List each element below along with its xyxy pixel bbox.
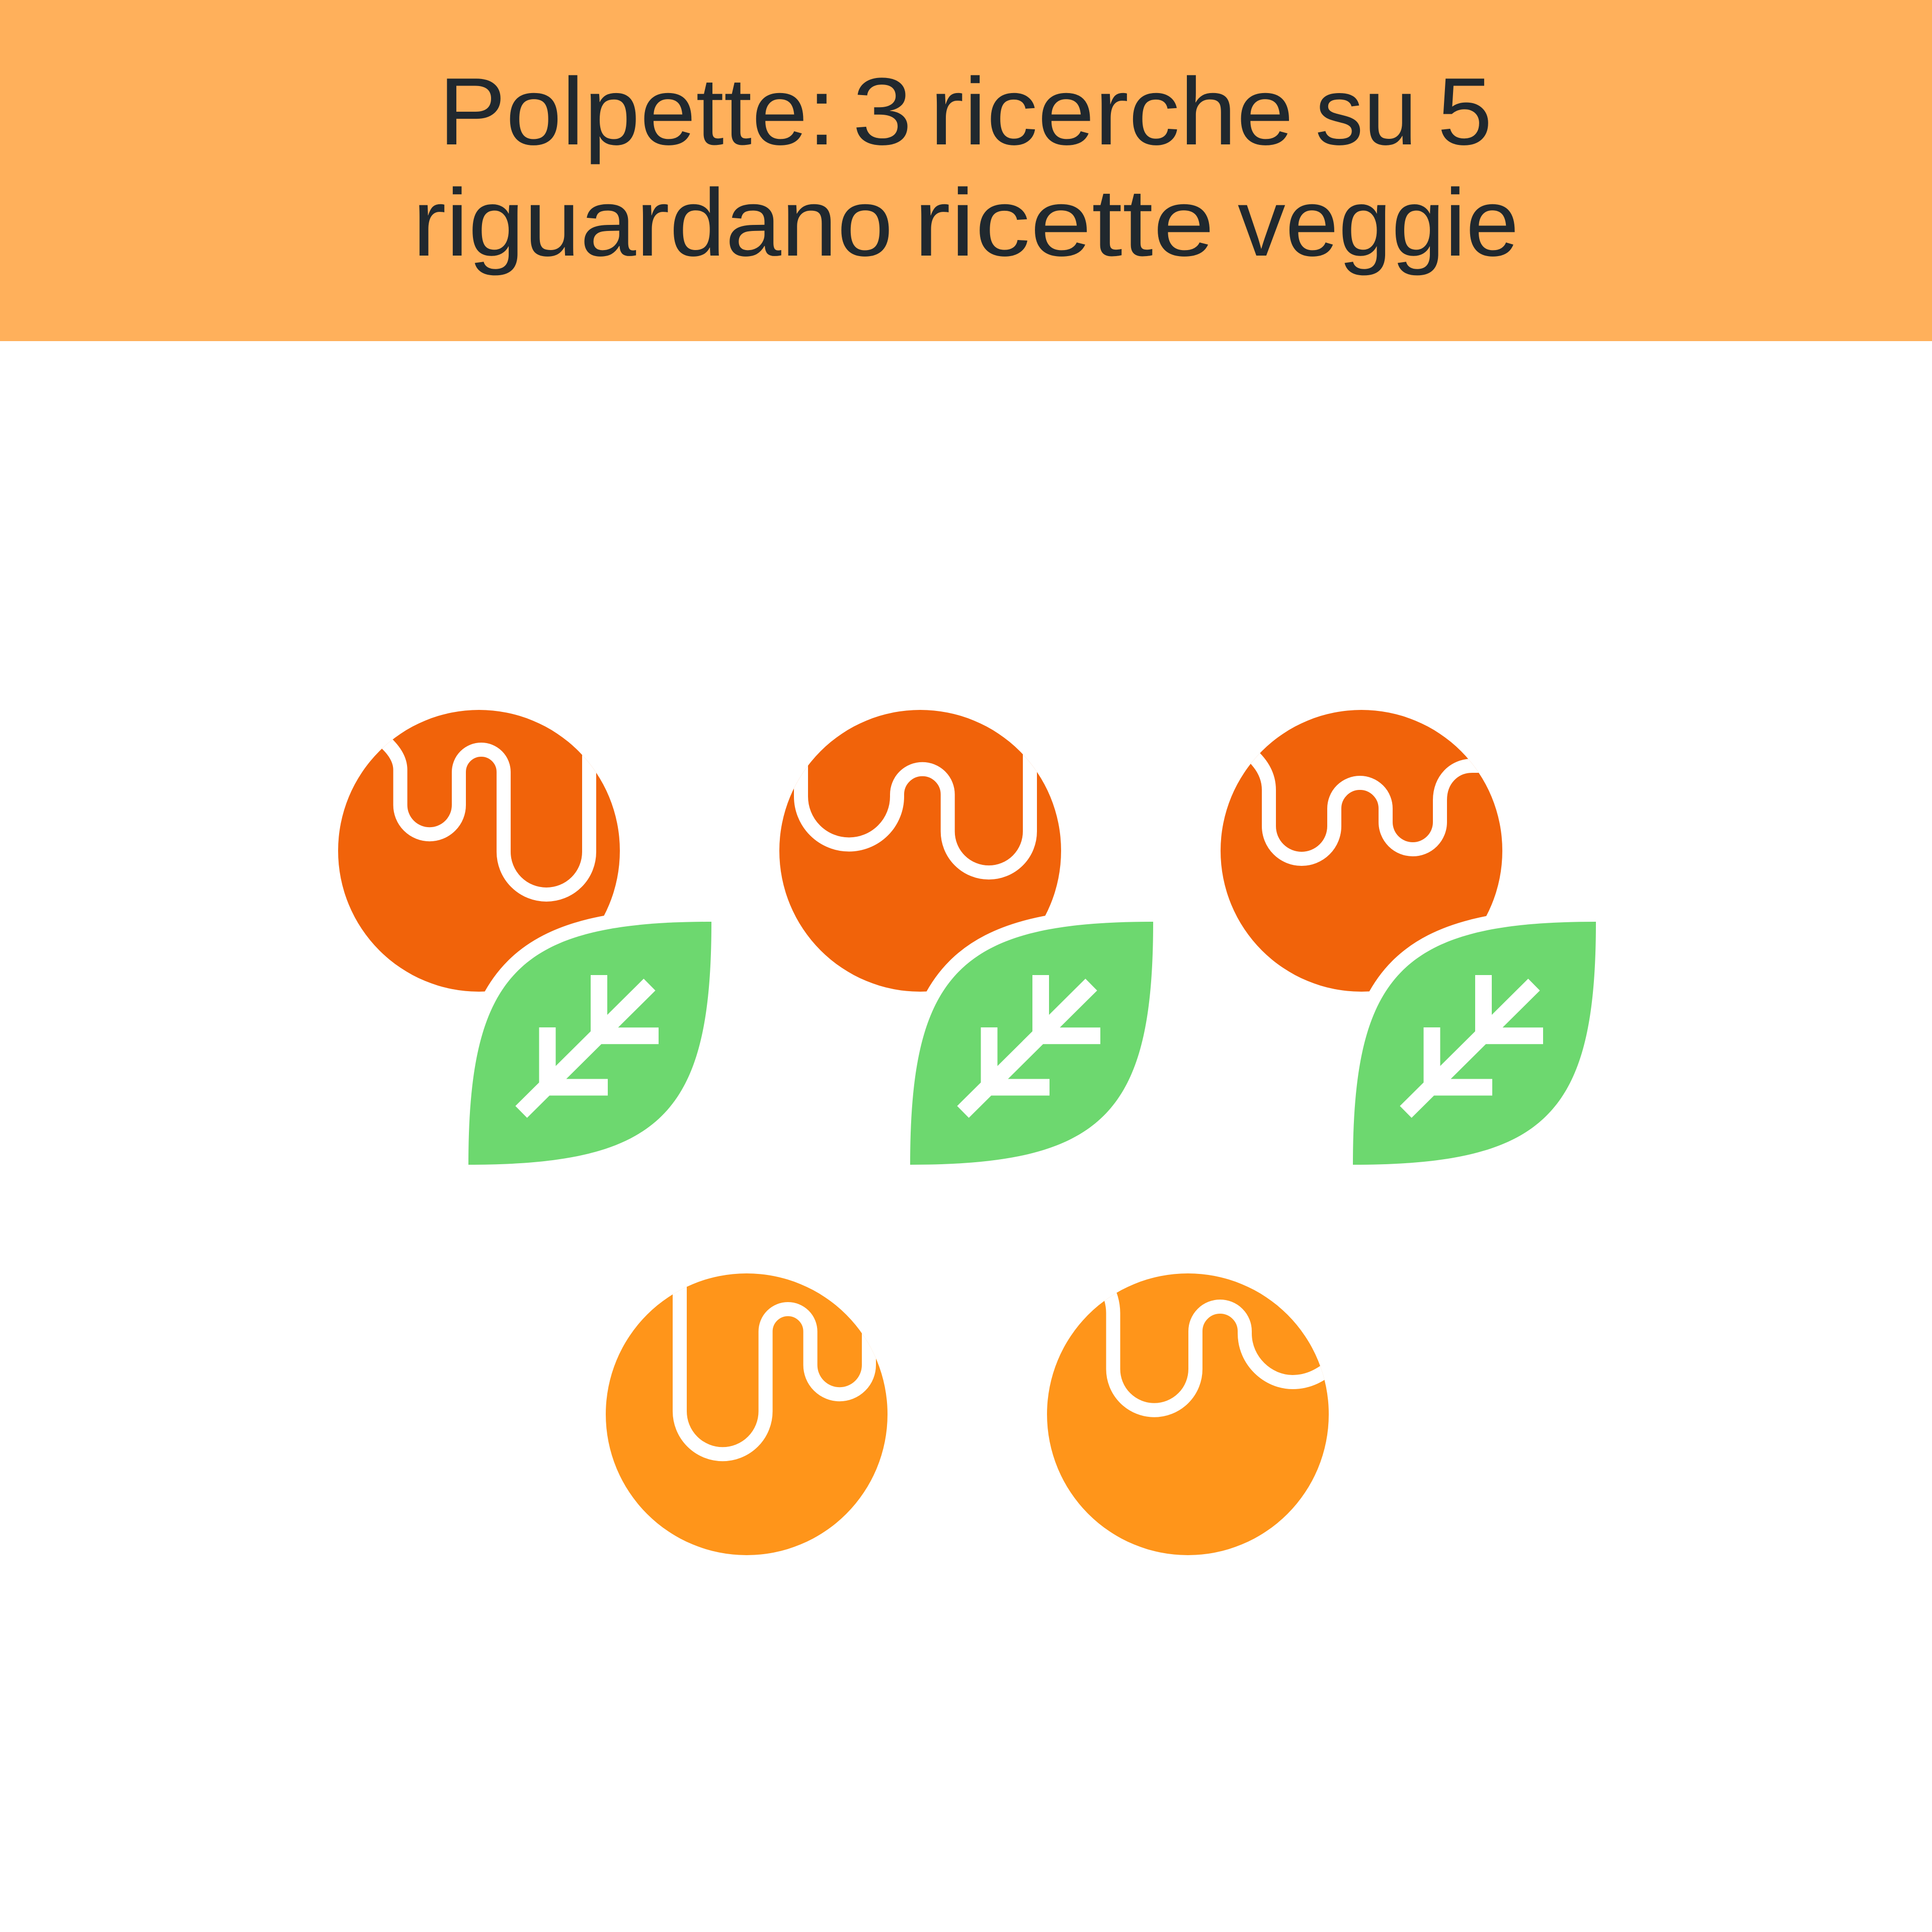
sauce squiggle 3 bbox=[1250, 754, 1504, 859]
title: ricette bbox=[914, 170, 1215, 276]
meatball circle 5 bbox=[1047, 1273, 1329, 1555]
sauce squiggle 2 bbox=[794, 755, 1037, 879]
meatball circle 4 bbox=[606, 1273, 888, 1555]
title: ricerche bbox=[930, 58, 1294, 165]
icon: meatball 5 bbox=[1047, 1273, 1338, 1555]
meatball circle 1 bbox=[338, 710, 620, 992]
icon: veggie meatball 3 bbox=[1221, 710, 1596, 1165]
title bbox=[413, 58, 1519, 276]
title: veggie bbox=[1238, 170, 1519, 276]
title: 5 bbox=[1437, 58, 1492, 165]
sauce squiggle 5 bbox=[1104, 1283, 1338, 1410]
leaf 3 bbox=[1353, 922, 1596, 1165]
header band bbox=[0, 0, 1932, 341]
leaf 1 bbox=[468, 922, 711, 1165]
icon: meatball 4 bbox=[606, 1258, 888, 1555]
title: riguardano bbox=[413, 170, 893, 276]
icon: veggie meatball 1 bbox=[338, 704, 711, 1165]
title: su bbox=[1315, 58, 1417, 165]
sauce squiggle 1 bbox=[382, 740, 596, 902]
meatball circle 3 bbox=[1221, 710, 1502, 992]
title: Polpette: bbox=[439, 58, 836, 165]
icon: veggie meatball 2 bbox=[779, 704, 1153, 1165]
title: 3 bbox=[852, 58, 912, 165]
leaf 2 bbox=[910, 922, 1153, 1165]
sauce squiggle 4 bbox=[680, 1258, 869, 1454]
meatball circle 2 bbox=[779, 710, 1061, 992]
